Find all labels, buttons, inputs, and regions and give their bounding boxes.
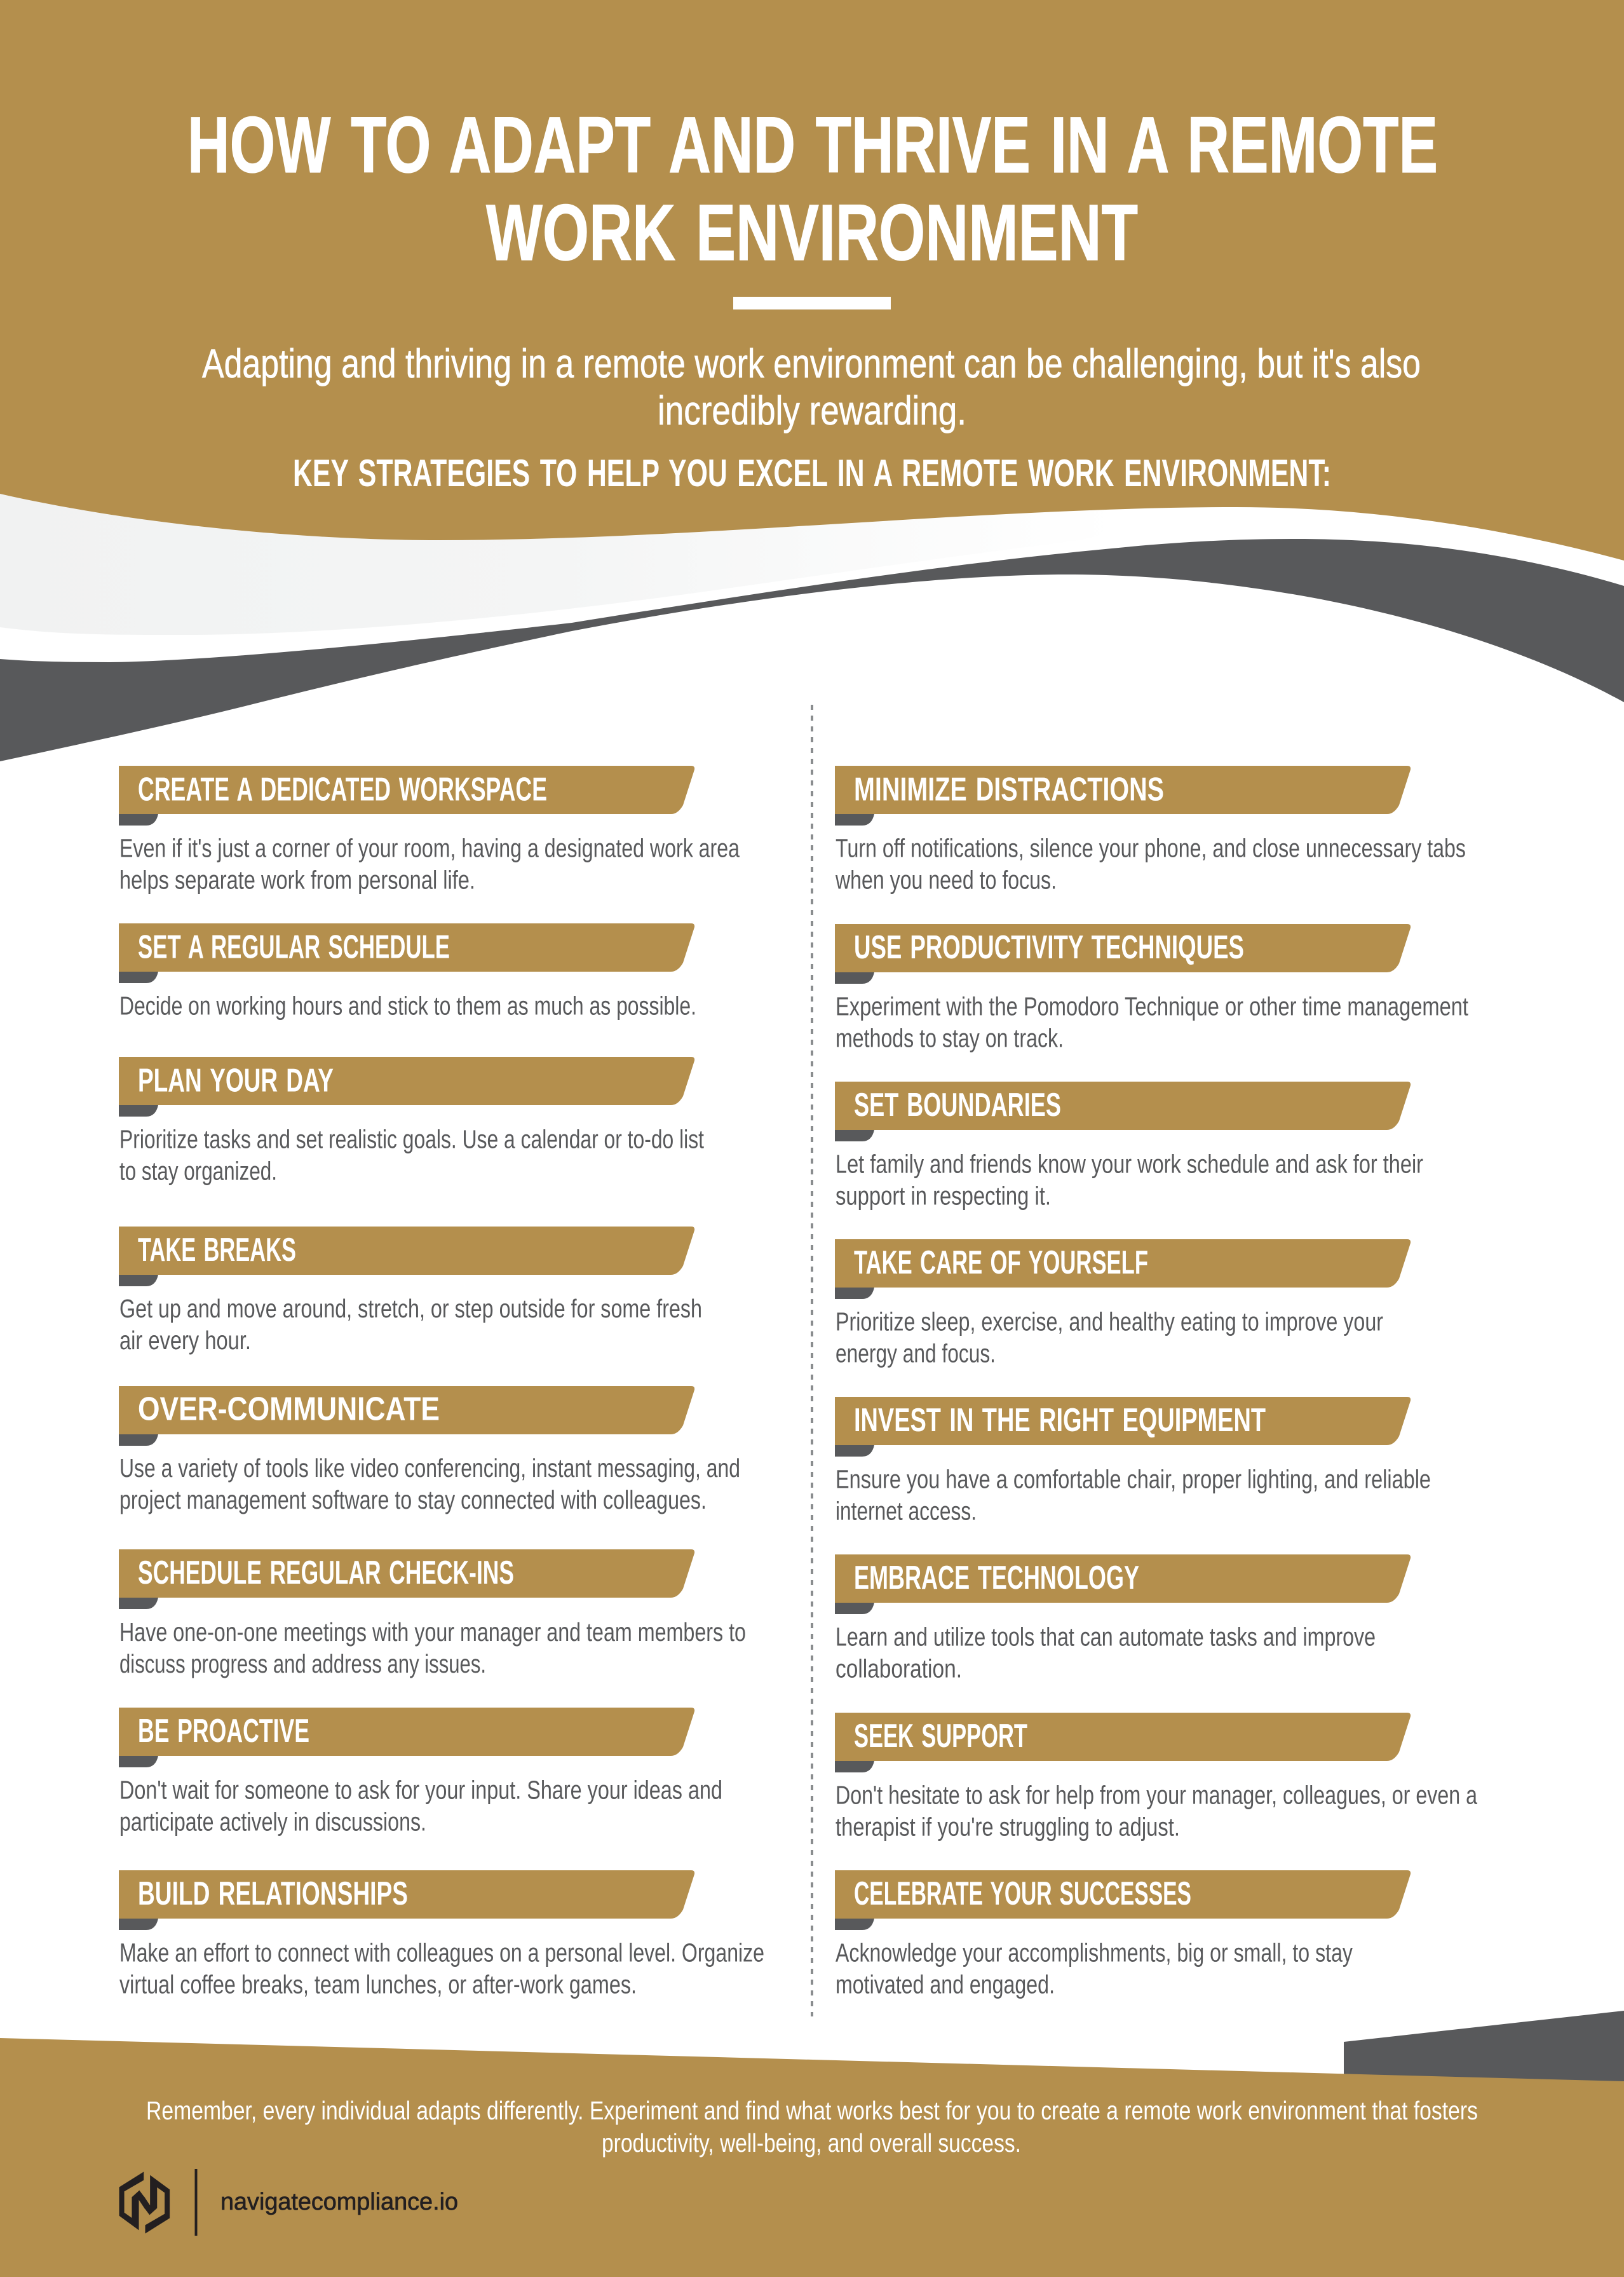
strategy: minimize distractions: when you need to focus. <box>835 866 1057 895</box>
panel: right column strategies <box>835 766 1477 1999</box>
strategy: seek support <box>835 1713 1477 1842</box>
title <box>187 101 1438 277</box>
strategy: build relationships: virtual coffee breaks, team lunches, or after-work games. <box>119 1970 637 1999</box>
strategy: take care of yourself <box>835 1239 1411 1368</box>
strategy: set boundaries: SET BOUNDARIES <box>854 1087 1061 1124</box>
strategy: be proactive: participate actively in discussions. <box>119 1807 426 1837</box>
strategy: over-communicate: Use a variety of tools like video conferencing, instant messaging, and <box>119 1453 740 1483</box>
gold header background <box>0 0 1624 561</box>
strategy: use productivity techniques: methods to stay on track. <box>836 1023 1064 1052</box>
strategy: be proactive: BE PROACTIVE <box>138 1713 309 1750</box>
strategy: over-communicate: project management software to stay connected with colleagues. <box>119 1485 707 1514</box>
strategy: build relationships: Make an effort to connect with colleagues on a personal level. Organize <box>119 1938 764 1968</box>
strategy: invest in the right equipment: INVEST IN THE RIGHT EQUIPMENT <box>854 1402 1266 1439</box>
strategy: use productivity techniques <box>835 924 1468 1052</box>
strategy: set a regular schedule <box>119 923 696 1021</box>
icon: hexagon N mark <box>119 2172 170 2234</box>
strategy: schedule regular check-ins <box>119 1549 746 1678</box>
strategy: set a regular schedule: SET A REGULAR SCHEDULE <box>138 929 450 966</box>
strategy: set boundaries <box>835 1082 1423 1210</box>
strategy: celebrate your successes: CELEBRATE YOUR SUCCESSES <box>854 1875 1191 1912</box>
strategy: embrace technology: collaboration. <box>836 1654 962 1683</box>
strategy: create a dedicated workspace: helps separate work from personal life. <box>119 866 475 895</box>
strategy: use productivity techniques: USE PRODUCTIVITY TECHNIQUES <box>854 929 1244 966</box>
strategy: celebrate your successes <box>835 1870 1411 1999</box>
strategy: over-communicate: OVER-COMMUNICATE <box>138 1390 440 1427</box>
dark grey wave <box>0 539 1624 761</box>
footer dark accent <box>1344 2011 1624 2084</box>
strategy: take breaks <box>119 1227 702 1355</box>
strategy: set a regular schedule: Decide on working hours and stick to them as much as possible. <box>119 991 696 1021</box>
strategy: celebrate your successes: motivated and engaged. <box>836 1970 1055 1999</box>
strategy: take care of yourself: TAKE CARE OF YOURSELF <box>854 1244 1148 1281</box>
subtitle <box>202 341 1421 433</box>
strategy: minimize distractions: Turn off notifications, silence your phone, and close unnecessary tabs <box>836 834 1466 863</box>
strategy: seek support: therapist if you're struggling to adjust. <box>836 1812 1180 1842</box>
strategy: invest in the right equipment: internet access. <box>836 1496 977 1525</box>
strategy: plan your day: PLAN YOUR DAY <box>138 1063 334 1099</box>
strategy: take breaks: Get up and move around, stretch, or step outside for some fresh <box>119 1294 702 1323</box>
strategy: minimize distractions <box>835 766 1466 895</box>
strategy: create a dedicated workspace: CREATE A DEDICATED WORKSPACE <box>138 771 547 808</box>
strategy: over-communicate <box>119 1386 740 1514</box>
logo divider <box>194 2169 197 2236</box>
logo wordmark: navigatecompliance.io <box>220 2189 458 2215</box>
subtitle: incredibly rewarding. <box>658 388 966 433</box>
strategy: take care of yourself: energy and focus. <box>836 1338 996 1368</box>
panel: left column strategies <box>119 766 764 1999</box>
strategy: embrace technology: Learn and utilize tools that can automate tasks and improve <box>836 1622 1376 1651</box>
strategy: be proactive: Don't wait for someone to ask for your input. Share your ideas and <box>119 1776 722 1805</box>
strategy: take breaks: TAKE BREAKS <box>138 1232 296 1268</box>
title underline <box>733 297 891 309</box>
closing message <box>146 2096 1478 2158</box>
closing message: productivity, well-being, and overall success. <box>602 2128 1021 2158</box>
strategy: minimize distractions: MINIMIZE DISTRACTIONS <box>854 771 1164 808</box>
strategy: be proactive <box>119 1708 722 1837</box>
strategy: schedule regular check-ins: SCHEDULE REGULAR CHECK-INS <box>138 1554 514 1591</box>
strategy: celebrate your successes: Acknowledge your accomplishments, big or small, to stay <box>836 1938 1353 1968</box>
strategy: build relationships <box>119 1870 764 1999</box>
title: WORK ENVIRONMENT <box>486 189 1138 277</box>
strategy: use productivity techniques: Experiment with the Pomodoro Technique or other time management <box>836 991 1468 1021</box>
strategy: invest in the right equipment: Ensure you have a comfortable chair, proper lighting, and reliable <box>836 1464 1431 1493</box>
strategy: take breaks: air every hour. <box>119 1326 251 1355</box>
strategy: invest in the right equipment <box>835 1397 1431 1525</box>
strategy: schedule regular check-ins: Have one-on-one meetings with your manager and team members to <box>119 1617 746 1647</box>
strategy: build relationships: BUILD RELATIONSHIPS <box>138 1875 408 1912</box>
strategy: seek support: SEEK SUPPORT <box>854 1718 1027 1755</box>
strategy: plan your day: Prioritize tasks and set realistic goals. Use a calendar or to-do list <box>119 1125 704 1154</box>
strategy: embrace technology <box>835 1554 1411 1683</box>
strategy: embrace technology: EMBRACE TECHNOLOGY <box>854 1560 1139 1596</box>
logo: navigatecompliance.io <box>119 2169 458 2236</box>
strategy: create a dedicated workspace: Even if it's just a corner of your room, having a designated work area <box>119 834 740 863</box>
strategy: create a dedicated workspace <box>119 766 740 895</box>
light grey wave <box>0 494 1236 635</box>
column divider <box>811 705 813 2016</box>
strategy: set boundaries: support in respecting it. <box>836 1181 1051 1210</box>
strategy: take care of yourself: Prioritize sleep, exercise, and healthy eating to improve your <box>836 1307 1383 1336</box>
strategy: set boundaries: Let family and friends know your work schedule and ask for their <box>836 1149 1423 1178</box>
strategy: plan your day: to stay organized. <box>119 1157 277 1186</box>
gold footer background <box>0 2038 1624 2277</box>
strategy: plan your day <box>119 1057 704 1186</box>
strategy: schedule regular check-ins: discuss progress and address any issues. <box>119 1649 486 1678</box>
